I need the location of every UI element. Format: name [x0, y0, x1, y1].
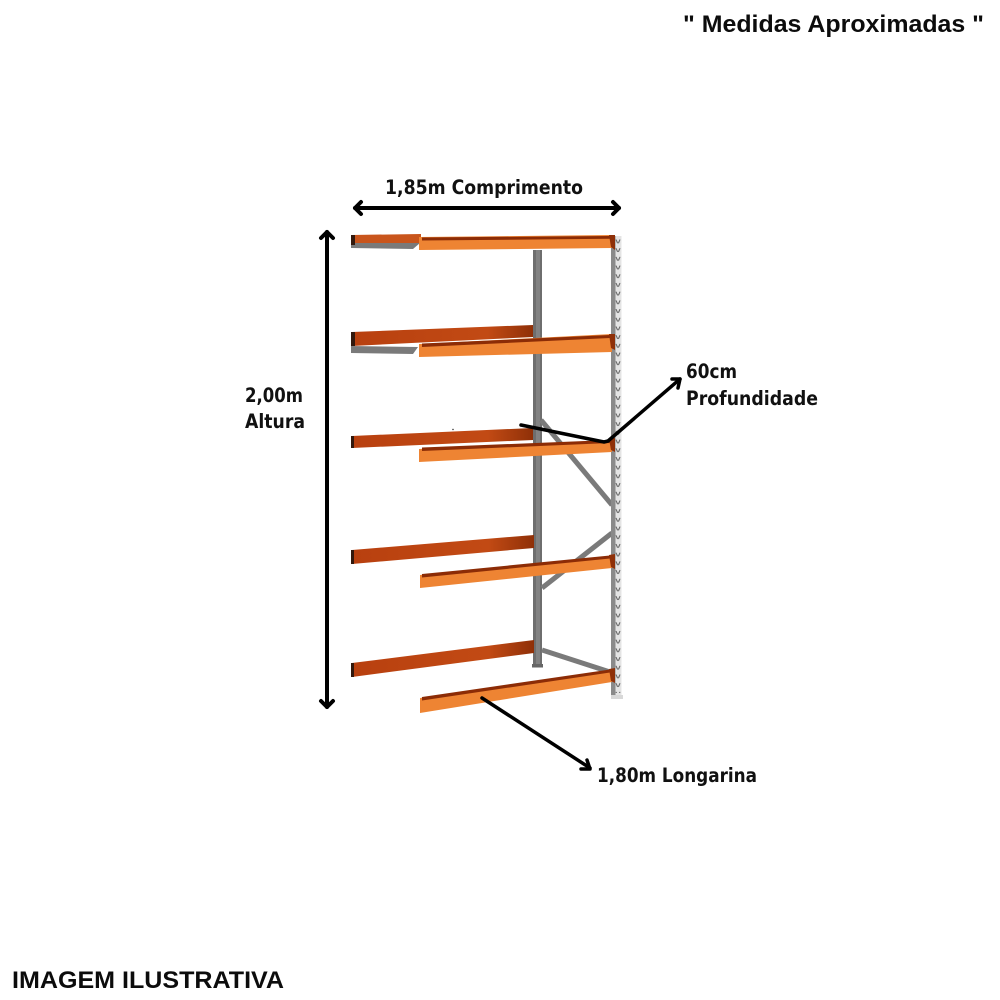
diagonal braces — [541, 420, 612, 672]
depth dimension label — [686, 360, 818, 410]
rack structure — [351, 234, 623, 713]
arrow: length — [355, 202, 619, 214]
arrow: height — [321, 232, 333, 707]
title: medidas aproximadas: " Medidas Aproximadas " — [683, 11, 984, 38]
level 3 beams — [351, 428, 615, 462]
level 1 beams — [351, 234, 615, 250]
beam dimension label: 1,80m Longarina — [597, 764, 757, 787]
illustrative image note: IMAGEM ILUSTRATIVA — [12, 967, 284, 994]
arrow: depth — [521, 379, 680, 442]
front upright — [611, 236, 623, 699]
height dimension label — [245, 384, 305, 433]
length dimension label: 1,85m Comprimento — [385, 176, 583, 199]
height dimension label: Altura — [245, 410, 305, 433]
depth dimension label: 60cm — [686, 360, 737, 383]
level 5 beams — [351, 640, 615, 713]
level 4 beams — [351, 535, 615, 588]
back upright — [532, 250, 543, 668]
level 2 beams — [351, 325, 615, 357]
depth dimension label: Profundidade — [686, 387, 818, 410]
height dimension label: 2,00m — [245, 384, 303, 407]
arrow: beam — [482, 698, 590, 769]
